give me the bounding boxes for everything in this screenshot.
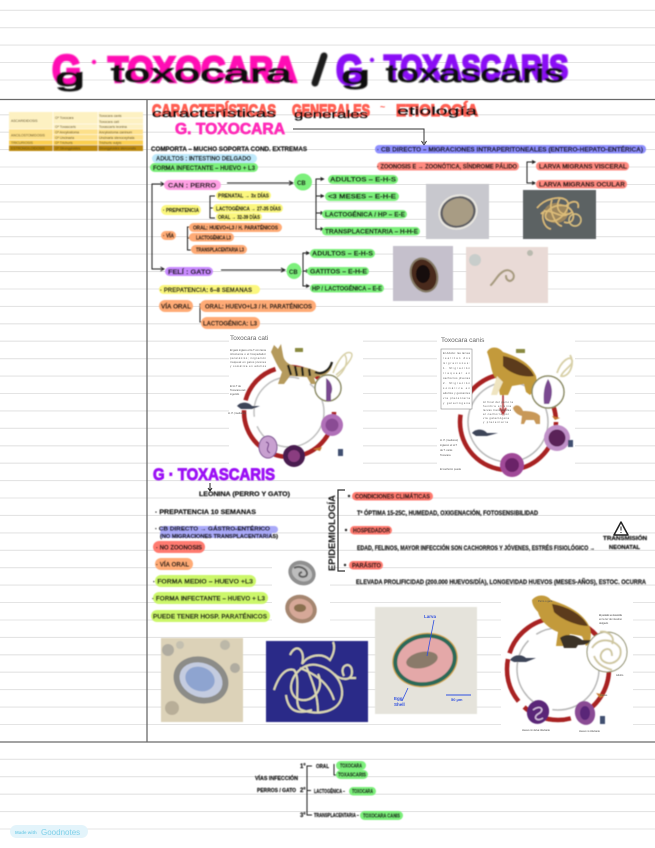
- list: vías perro: ORAL: HUEVO+L3 / H. PARATÉNICOS: [193, 224, 279, 232]
- title: pink G. Toxocara: toxocara: [111, 60, 292, 88]
- adult worms: [557, 355, 572, 376]
- detail: edad: EDAD, FELINOS, MAYOR INFECCIÓN SON CACHORROS Y JÓVENES, ESTRÉS FISIOLÓGICO →: [357, 544, 595, 552]
- text: cat cycle notes: [228, 348, 267, 415]
- label: can perro: CAN : PERRO: [168, 184, 216, 190]
- photo: larva Toxocara: [466, 247, 548, 303]
- note: ciclo biológico directo: · CB DIRECTO – MIGRACIONES INTRAPERITONEALES (ENTERO-HEPATO-ENTÉRICA): [377, 146, 643, 154]
- section heading: G. Toxascaris: G · TOXASCARIS: [153, 465, 275, 484]
- factor: parásito: [344, 561, 383, 570]
- list: vías gato: [200, 300, 316, 329]
- heading: G. Toxocara: G. TOXOCARA: [175, 121, 285, 138]
- note: ciclo directo: · CB DIRECTO → GÁSTRO-ENTÉRICO: [155, 524, 270, 532]
- photo: huevo Toxocara cati: [393, 246, 453, 301]
- heading: características generales y etiología: CARACTERÍSTICAS: [152, 101, 276, 120]
- list: ciclo gato: ADULTOS – E-H-S: [312, 252, 373, 258]
- diagram: vías de infección: 3º: [300, 813, 306, 819]
- callout: transmisión neonatal: [603, 534, 647, 551]
- arrow: gato to CB: [221, 268, 285, 272]
- mouse: [510, 655, 536, 662]
- label: felí gato: [165, 267, 213, 276]
- classification table: Gª Strongyloides: [55, 146, 81, 150]
- title: pink G. Toxocara: [52, 46, 297, 93]
- title: [52, 46, 568, 93]
- text: central notes: al cachorro por: [483, 412, 509, 416]
- list: vías perro: [188, 223, 282, 254]
- list: ciclo perro: TRANSPLACENTARIA – H-H-E: [325, 230, 418, 236]
- badge: CB perro: CB: [297, 181, 306, 187]
- label: prepatencia gato: [159, 285, 260, 294]
- note: adultos: ADULTOS : INTESTINO DELGADO: [156, 156, 251, 162]
- note: ciclo directo: (NO MIGRACIONES TRANSPLACENTARIAS): [160, 534, 278, 540]
- diagram: vías de infección: 2º: [300, 788, 306, 794]
- heading: características generales y etiología: características: [152, 108, 277, 120]
- label: vía oral gato: VÍA ORAL: [161, 302, 191, 310]
- detail: temperatura: Tª ÓPTIMA 15-25C, HUMEDAD, OXIGENACIÓN, FOTOSENSIBILIDAD: [357, 509, 539, 517]
- photo: huevo Toxocara canis: [426, 184, 489, 239]
- text: central notes: de T. canis: [440, 448, 453, 452]
- tag: toxocara canis: TOXOCARA CANIS: [363, 814, 401, 820]
- tag: toxascaris: [336, 770, 368, 779]
- badge: Made with Goodnotes: [10, 825, 88, 838]
- label: prepatencia perro: · PREPATENCIA: [163, 208, 199, 214]
- mouse: [237, 403, 260, 409]
- factor: hospedador: [345, 526, 392, 534]
- classification table: Toxascaris leonina: [99, 125, 127, 129]
- icon: warning triangle: [614, 522, 628, 535]
- text: caption lifecycle: en la luz de intestino: [599, 617, 623, 621]
- tag: toxascaris: TOXASCARIS: [338, 772, 367, 778]
- classification table: Gª Uncinaria: [55, 136, 74, 140]
- text: cat cycle notes: El H-T de: [230, 384, 241, 388]
- classification table: Trichuris vulpis: [99, 141, 122, 145]
- text: central notes: larvas transmitidas: [483, 408, 512, 412]
- text: cat cycle notes: infectante o el hospedador: [230, 352, 266, 356]
- text: central notes: ingieren el H-T: [440, 443, 457, 447]
- title: pink G. Toxocara: G: [52, 46, 81, 93]
- classification table: [9, 112, 143, 151]
- text: cat cycle notes: Toxocara cati: [230, 388, 246, 392]
- title: purple G. Toxascaris: G: [336, 46, 363, 93]
- note: zoonosis larva migrans: LARVA MIGRANS OCULAR: [539, 182, 626, 188]
- arrow: perro to CB: [227, 181, 293, 185]
- notes: Toxascaris: [151, 492, 290, 622]
- list: ciclo perro: ADULTOS – E-H-S: [330, 178, 396, 184]
- text box: migración: [441, 349, 472, 409]
- heading: características generales y etiología: GENERALES: [292, 101, 370, 120]
- arrow: Toxocara to ciclo biológico: [293, 129, 426, 145]
- text: central notes: H. P. (roedores): [440, 438, 458, 442]
- text: cat cycle notes: paraténico; migración: [230, 356, 267, 360]
- text: cat cycle notes: H. P. (roedores): [228, 411, 246, 415]
- text: caption lifecycle: delgado: [599, 621, 609, 625]
- heading: características generales y etiología: etiología: [397, 104, 478, 118]
- label: prepatencia perro: [161, 205, 201, 215]
- tag: toxocara: [336, 761, 366, 770]
- tag: toxocara canis: [360, 811, 403, 820]
- title: pink G. Toxocara: g: [55, 64, 85, 92]
- text: cat cycle notes: traqueal en gatos jóvenes: [230, 360, 267, 364]
- diagram: perro y gato tree: [152, 174, 420, 329]
- block: epidemiología: [344, 492, 647, 586]
- heading: características generales y etiología: generales: [294, 109, 369, 121]
- text box: migración: realizan dos: [443, 356, 471, 360]
- text box: migración: 1. Migración: [443, 366, 471, 370]
- white gap behind eggs: [272, 555, 330, 625]
- lifecycle: Toxascaris leonina: [501, 592, 633, 735]
- callout: transmisión neonatal: TRANSMISIÓN: [603, 534, 647, 542]
- tag: toxocara: TOXOCARA: [340, 764, 362, 770]
- classification table: ANCILOSTOMIDOSIS: [11, 134, 46, 138]
- egg: Toxascaris marrón: [281, 590, 321, 628]
- callout: transmisión neonatal: NEONATAL: [609, 545, 640, 551]
- list: vías perro: LACTOGÉNICA L3: [196, 234, 231, 242]
- label: egg shell: [394, 688, 408, 707]
- note: zoonosis larva migrans: · ZOONOSIS E → ZOONÓTICA, SÍNDROME PÁLIDO: [377, 162, 517, 170]
- text: caption lifecycle: Huevo no infectante: [579, 729, 601, 733]
- diagram: vías de infección: 1º: [300, 764, 306, 770]
- text: caption lifecycle: El parásito se desarrolla: [599, 613, 623, 617]
- factor: hospedador: HOSPEDADOR: [353, 528, 391, 534]
- text: cat cycle notes: y somática en adultos: [230, 364, 267, 368]
- text: caption lifecycle: Huevo con larva infectante: [522, 728, 551, 732]
- list: vías gato: LACTOGÉNICA: L3: [203, 320, 258, 328]
- diagram: vías de infección: [255, 761, 403, 820]
- text box: migración: migraciones:: [443, 361, 470, 365]
- classification table: Strongyloides stercoralis: [99, 146, 136, 150]
- text box: migración: somática en: [443, 386, 471, 390]
- title: purple G. Toxascaris: toxascaris: [386, 60, 564, 88]
- photo: huevo Toxascaris con etiquetas: [375, 607, 477, 714]
- text: caption lifecycle: Adulto: [616, 673, 624, 677]
- classification table: Gª Trichuris: [55, 141, 73, 145]
- dog: [487, 348, 537, 395]
- label: egg shell: Shell: [394, 702, 405, 707]
- heading: características generales y etiología: [152, 101, 478, 121]
- list: vías gato: ORAL: HUEVO+L3 / H. PARATÉNICOS: [205, 302, 312, 310]
- scale bar: 50 µm: [451, 697, 463, 702]
- lifecycle: Toxocara canis: [437, 333, 575, 477]
- classification table: Gª Toxocara: [55, 116, 74, 120]
- list: ciclo perro: <3 MESES – E-H-E: [328, 194, 396, 200]
- badge: Made with Goodnotes: Made with: [15, 830, 37, 835]
- arrow: Toxascaris to leonina: [208, 483, 212, 491]
- list: prepatencia: LACTOGÉNICA → 27-35 DÍAS: [216, 204, 282, 212]
- classification table: Toxocara cati: [99, 120, 119, 124]
- notes: toxocara general: [150, 147, 307, 172]
- label: larva: Larva: [424, 614, 437, 619]
- text: caption lifecycle: Perro o gato: [538, 599, 553, 603]
- tag: toxocara lactogénica: TOXOCARA: [352, 789, 373, 795]
- classification table: Ancylostoma caninum: [99, 130, 132, 134]
- text: central notes: hembra elimina: [483, 404, 512, 408]
- factor: condiciones climáticas: [348, 492, 433, 500]
- ring: [507, 618, 609, 720]
- badge: CB gato: CB: [289, 270, 298, 276]
- label: egg shell: Egg: [394, 696, 403, 701]
- text: central notes: [440, 400, 514, 471]
- text: central notes: Toxocara: [440, 453, 451, 457]
- worms: [587, 632, 627, 672]
- caption: Toxocara canis title: Toxocara canis: [441, 337, 485, 344]
- label: vía perro: [161, 231, 176, 240]
- label: vías de infección: VÍAS INFECCIÓN: [255, 774, 298, 782]
- adult worm: [333, 352, 352, 377]
- note: ciclo biológico directo: [375, 145, 646, 154]
- text box: migración: cachorros jóvenes: [443, 376, 471, 380]
- list: prepatencia: [210, 191, 283, 221]
- tag: toxocara lactogénica: [349, 787, 376, 796]
- badge: CB perro: [294, 174, 312, 190]
- ring: [460, 374, 556, 470]
- note: paraténicos: PUEDE TENER HOSP. PARATÉNICOS: [153, 612, 267, 620]
- note: zoonosis larva migrans: [377, 160, 629, 188]
- text box: migración: vía placentaria: [443, 396, 471, 400]
- bracket: epidemiología: [338, 490, 345, 571]
- mouse: [472, 430, 498, 436]
- note: adultos: [152, 154, 257, 163]
- classification table: Toxocara canis: [99, 114, 122, 118]
- label: vía perro: · VÍA: [163, 232, 174, 240]
- label: felí gato: FELÍ : GATO: [168, 268, 211, 276]
- egg: Toxascaris gris: [284, 556, 320, 590]
- text: central notes: y placentaria: [483, 420, 509, 424]
- puppy: [513, 405, 540, 424]
- list: prepatencia: ORAL → 32-39 DÍAS: [218, 213, 261, 221]
- title: pink G. Toxocara: TOXOCARA: [108, 49, 297, 90]
- text: cat cycle notes: ingerido: [230, 392, 240, 396]
- photo: adultos Toxocara canis: [523, 190, 596, 239]
- factor: condiciones climáticas: CONDICIONES CLIMÁTICAS: [355, 494, 430, 500]
- text: central notes: Al final del parto la: [483, 400, 514, 404]
- diagram: vías de infección: PERROS / GATO: [257, 788, 296, 794]
- ring: [244, 367, 334, 457]
- factor: parásito: PARÁSITO: [352, 562, 381, 570]
- text box: migración: El Adulto: las larvas: [443, 351, 471, 355]
- note: forma infectante 2: · FORMA INFECTANTE – HUEVO + L3: [152, 596, 266, 602]
- list: prepatencia: PRENATAL → 3x DÍAS: [218, 192, 270, 200]
- small marks: [313, 447, 322, 451]
- heading: características generales y etiología: ~: [380, 102, 385, 112]
- classification table: Uncinaria stenocephala: [99, 136, 135, 140]
- text: cat cycle notes: El gato ingiere el H-T con larva: [230, 348, 267, 352]
- diagram: vías de infección: LACTOGÉNICA –: [314, 787, 345, 795]
- badge: Made with Goodnotes: Goodnotes: [41, 828, 80, 837]
- classification table: ASCARIDIDOSIS: [11, 119, 38, 123]
- heading: características generales y etiología: ETIOLOGÍA: [396, 101, 478, 120]
- list: ciclo perro: [316, 175, 420, 236]
- title: purple G. Toxascaris: [336, 46, 568, 93]
- photo: huevo Toxascaris azul: [161, 638, 243, 722]
- note: forma infectante 1: · FORMA MEDIO – HUEVO +L3: [153, 580, 254, 586]
- title: slash: [315, 56, 324, 83]
- text: caption lifecycle: Heces: [600, 693, 608, 697]
- diagram: vías de infección: ORAL: [316, 764, 329, 770]
- label: vía oral gato: [159, 300, 193, 312]
- note: prepatencia: · PREPATENCIA 10 SEMANAS: [155, 510, 256, 516]
- note: forma infectante: [150, 163, 258, 172]
- note: forma infectante: FORMA INFECTANTE – HUEVO + L3: [153, 166, 256, 172]
- text: caption lifecycle: [522, 599, 624, 733]
- eggs: [321, 414, 343, 436]
- list: vías perro: TRANSPLACENTARIA L3: [196, 248, 244, 254]
- list: ciclo gato: HP / LACTOGÉNICA – E-E: [312, 284, 382, 292]
- text: central notes: El cachorro puede: [440, 467, 462, 471]
- text box: migración: 2. Migración: [443, 381, 471, 385]
- notes: toxocara general: COMPORTA – MUCHO SOPORTA COND. EXTREMAS: [151, 147, 307, 153]
- badge: CB gato: [286, 263, 302, 279]
- classification table: ESTRONGILOIDOSIS: [11, 146, 45, 150]
- list: ciclo gato: GATITOS – E-H-E: [310, 270, 367, 276]
- text box: migración: y galactógena: [443, 401, 471, 405]
- text box: migración: adultos y gestantes: [443, 391, 471, 395]
- text: central notes: vía galactógena: [483, 416, 510, 420]
- classification table: Gª Ancylostoma: [55, 130, 79, 134]
- label: can perro: [164, 180, 221, 190]
- classification table: Gª Toxascaris: [55, 125, 76, 129]
- note: ciclo directo: [155, 524, 278, 540]
- title: purple G. Toxascaris: TOXASCARIS: [384, 49, 568, 87]
- label: prepatencia gato: · PREPATENCIA: 6–8 SEMANAS: [160, 288, 252, 294]
- note: vía oral: · VÍA ORAL: [156, 560, 189, 568]
- heading: epidemiología: EPIDEMIOLOGÍA: [327, 494, 337, 571]
- title: purple G. Toxascaris: g: [341, 62, 370, 90]
- notes: Toxascaris: LEONINA (PERRO Y GATO): [199, 492, 290, 498]
- eggs: [524, 697, 552, 727]
- note: zoonosis larva migrans: LARVA MIGRANS VISCERAL: [539, 164, 627, 170]
- diagram: vías de infección: TRANSPLACENTARIA –: [314, 813, 359, 819]
- text box: migración: traqueal en: [443, 371, 471, 375]
- list: ciclo perro: LACTOGÉNICA / HP – E-E: [325, 210, 405, 218]
- cat: [271, 344, 332, 384]
- dog and cat: [532, 596, 591, 646]
- lifecycle: Toxocara cati: [228, 330, 363, 467]
- list: ciclo gato: [303, 249, 384, 292]
- classification table: TRICURIOSIS: [11, 141, 34, 145]
- caption: Toxocara cati title: Toxocara cati: [230, 335, 268, 342]
- eggs: [544, 425, 570, 451]
- note: no zoonosis: · NO ZOONOSIS: [156, 546, 202, 552]
- photo: adultos Toxascaris sobre azul: [266, 641, 368, 722]
